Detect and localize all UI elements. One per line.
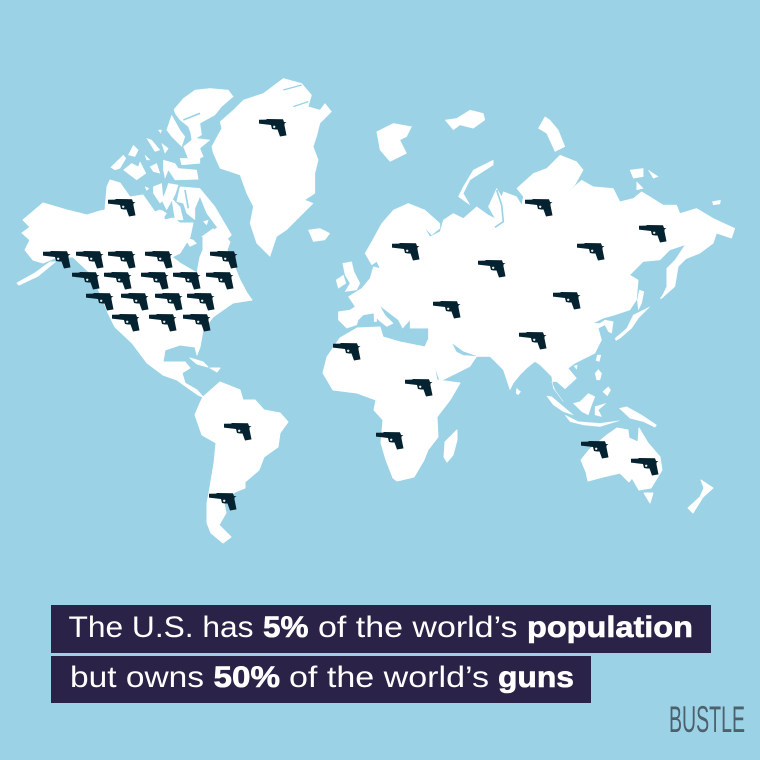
caption line 1: 5%: [263, 611, 308, 644]
caption line 2: but owns: [70, 661, 204, 694]
United Kingdom: [343, 262, 360, 292]
gun icons: rest of the world: [108, 119, 666, 510]
Quebec north: [203, 228, 230, 250]
world map: [17, 78, 735, 543]
Canadian Arctic islands: [111, 88, 233, 250]
Iceland: [308, 228, 330, 242]
Japan and Southeast Asian islands: [547, 290, 667, 427]
Australia: [581, 428, 662, 490]
caption line 1: population: [527, 611, 693, 644]
Kamchatka: [661, 245, 690, 299]
Madagascar: [444, 430, 457, 462]
Cuba: [190, 358, 208, 367]
Franz Josef Land: [445, 110, 485, 130]
Persian Gulf: [453, 344, 476, 356]
Sri Lanka: [516, 388, 521, 395]
gun icons: United States cluster: [43, 251, 238, 332]
Baja California gulf: [128, 343, 141, 360]
caption line 1: [51, 605, 711, 653]
caption line 1: The U.S. has: [68, 611, 254, 644]
Ob Gulf: [495, 190, 503, 227]
North America: [17, 180, 252, 397]
caption line 2: of the world’s: [289, 661, 489, 694]
South America: [195, 382, 288, 543]
Tasmania: [644, 493, 653, 503]
New Siberian Islands: [630, 168, 643, 178]
Eurasia: [336, 110, 735, 402]
Svalbard: [377, 123, 412, 162]
caption line 2: guns: [498, 661, 574, 694]
Greenland: [212, 78, 332, 257]
Ireland: [336, 275, 346, 288]
Severnaya Zemlya: [538, 117, 565, 152]
Novaya Zemlya: [458, 160, 493, 205]
caption line 1: of the world’s: [318, 611, 518, 644]
caption line 2: 50%: [214, 661, 280, 694]
Corsica and Sardinia: [374, 312, 377, 322]
caption line 2: [51, 656, 591, 703]
Aleutians: [17, 262, 55, 285]
New Zealand: [688, 480, 713, 513]
Africa: [323, 327, 460, 481]
Hispaniola: [210, 368, 220, 372]
